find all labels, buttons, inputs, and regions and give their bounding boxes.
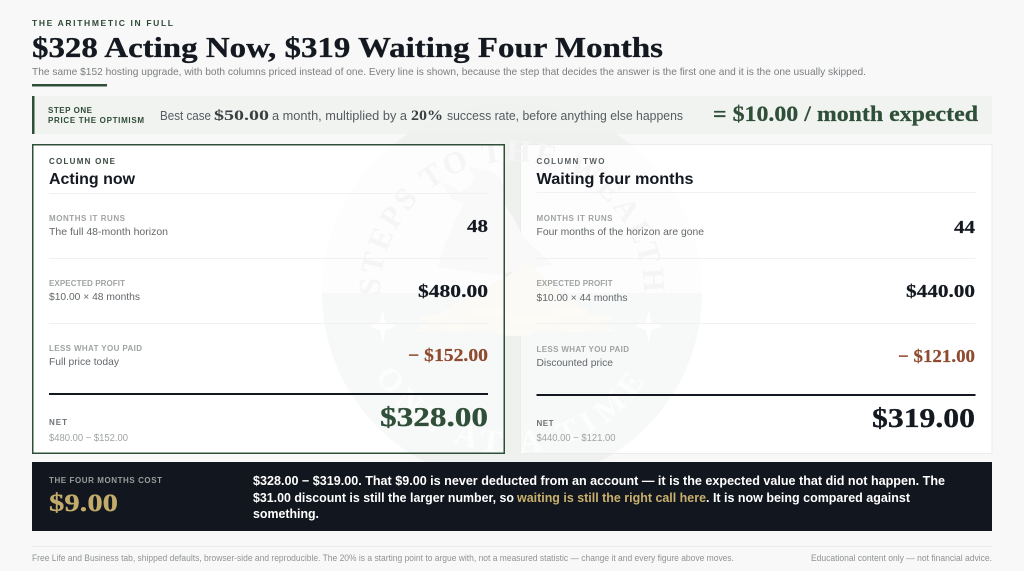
title: $328 Acting Now, $319 Waiting Four Months [32,32,663,64]
explanation text: waiting is still the right call here [516,491,706,505]
step result: = $10.00 / month expected [713,101,978,126]
step label [48,106,144,125]
explanation text: . It is now being compared against [706,491,911,505]
row: months: The full 48-month horizon [49,226,168,238]
column heading: Waiting four months [536,171,694,188]
explanation text: something. [253,507,319,521]
step formula: 20% [411,108,443,124]
row: less what you paid [536,345,975,369]
subtitle: The same $152 hosting upgrade, with both columns priced instead of one. Every line is shown, because the step that decides the answer is the first one and it is the one usually skipped. [32,66,866,78]
row: less what you paid: Discounted price [536,357,613,369]
accent rule [32,84,107,86]
watermark emblem: STEPS TO THE WEALTH [360,144,664,293]
row: months: Four months of the horizon are gone [536,226,704,238]
step formula: success rate, before anything else happens [447,109,683,123]
row: net: NET [536,419,554,428]
callout: the four months cost [32,462,992,531]
step formula: Best case [160,109,211,123]
row: net: $319.00 [872,403,975,433]
step formula: a month, multiplied by a [272,109,407,123]
row: less what you paid [49,344,488,368]
row: expected profit [49,279,488,303]
explanation text: $31.00 discount is still the larger number, so [253,491,514,505]
row: net: $328.00 [380,402,488,432]
row: expected profit: $10.00 × 48 months [49,291,140,303]
watermark emblem [360,144,664,454]
step one band background [32,96,992,134]
explanation text: $328.00 − $319.00. That $9.00 is never deducted from an account — it is the expected value that did not happen. The [253,474,945,488]
row: months [49,214,488,238]
column heading: COLUMN TWO [536,157,604,166]
panel: waiting four months [536,157,976,444]
column heading [49,157,136,188]
column heading: COLUMN ONE [49,157,116,166]
row: less what you paid: − $152.00 [408,345,488,365]
row: less what you paid: LESS WHAT YOU PAID [536,345,629,354]
watermark emblem: ONE AT A TIME [520,452,522,454]
row: net: $440.00 − $121.00 [536,433,616,444]
source note: Free Life and Business tab, shipped defaults, browser-side and reproducible. The 20% is a starting point to argue with, not a measured statistic — change it and every figure above moves. [32,553,734,563]
column heading [536,157,694,188]
row: expected profit [536,279,975,304]
row: less what you paid: LESS WHAT YOU PAID [49,344,142,353]
row: less what you paid: − $121.00 [898,346,975,366]
explanation text [253,474,945,521]
row: months: 48 [467,216,488,236]
row: expected profit: EXPECTED PROFIT [536,279,613,288]
step formula [160,108,683,124]
row: expected profit: $480.00 [418,281,488,301]
row: months: MONTHS IT RUNS [49,214,126,223]
row: expected profit: EXPECTED PROFIT [49,279,125,288]
column heading: Acting now [49,171,136,188]
header [32,18,866,86]
row: expected profit: $10.00 × 44 months [536,292,628,304]
step label: PRICE THE OPTIMISM [48,116,144,125]
panel backgrounds [33,144,992,454]
step one content [48,101,978,126]
footer [32,546,992,563]
row: net [49,402,488,444]
row: less what you paid: Full price today [49,356,120,368]
row: net: NET [49,418,67,427]
row: net [536,403,975,444]
step label: STEP ONE [48,106,93,115]
cost figure: $9.00 [49,490,118,517]
row: months: MONTHS IT RUNS [536,214,613,223]
row: expected profit: $440.00 [906,281,975,301]
eyebrow: THE ARITHMETIC IN FULL [32,18,173,28]
row: net: $480.00 − $152.00 [49,433,128,444]
row: months [536,214,975,238]
panel: acting now [33,145,504,453]
cost figure: THE FOUR MONTHS COST [49,476,162,485]
cost figure [49,476,162,517]
disclaimer: Educational content only — not financial advice. [811,553,992,563]
row: months: 44 [954,217,975,237]
step formula: $50.00 [214,108,269,124]
watermark disk [322,103,702,483]
